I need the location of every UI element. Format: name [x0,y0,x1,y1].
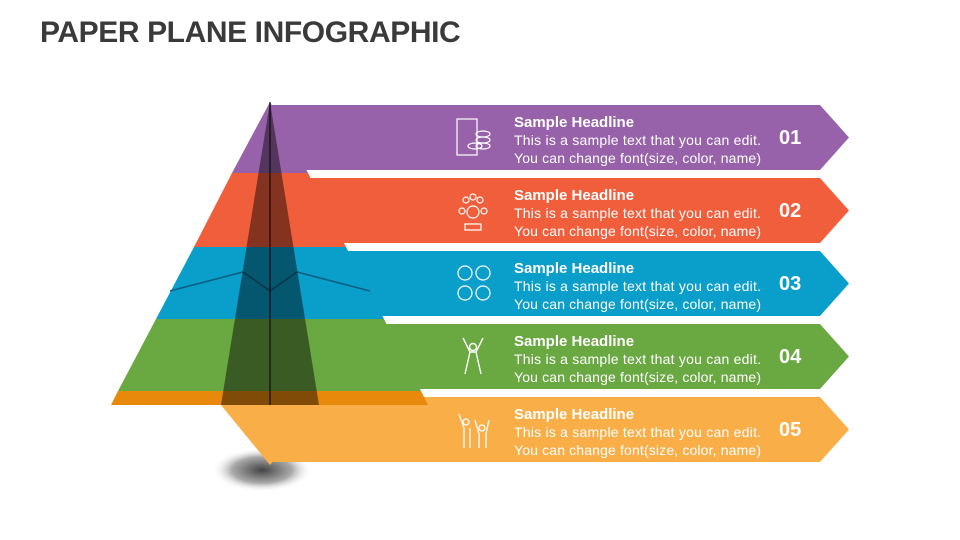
shadow [212,448,312,492]
text 3: This is a sample text that you can edit. [514,278,761,294]
panel: row 3 [270,251,849,316]
text 4: Sample Headline [514,333,634,350]
number 04: 04 [779,346,802,368]
number 03: 03 [779,273,801,295]
text 4: This is a sample text that you can edit. [514,351,761,367]
text 5: This is a sample text that you can edit. [514,424,761,440]
text 2: You can change font(size, color, name) [514,223,761,239]
panel: row 2 [270,178,849,243]
text 3 [514,260,761,312]
panel: row 5 [270,397,849,462]
text 5: Sample Headline [514,406,634,423]
text 2: This is a sample text that you can edit. [514,205,761,221]
icon: coins [457,119,490,155]
text 4 [514,333,761,385]
number 02: 02 [779,200,801,222]
text 3: Sample Headline [514,260,634,277]
panel: row 4 [270,324,849,389]
icon: team celebrate [459,414,489,448]
number 05: 05 [779,419,801,441]
text 1 [514,114,761,166]
icon: cheering person [463,338,483,374]
title: PAPER PLANE INFOGRAPHIC [40,16,460,49]
text 4: You can change font(size, color, name) [514,369,761,385]
text 5 [514,406,761,458]
icon: person ideas [459,194,487,230]
text 3: You can change font(size, color, name) [514,296,761,312]
text 1: Sample Headline [514,114,634,131]
icon: faces [458,266,490,300]
text 2: Sample Headline [514,187,634,204]
text 5: You can change font(size, color, name) [514,442,761,458]
text 1: You can change font(size, color, name) [514,150,761,166]
text 2 [514,187,761,239]
paper plane pyramid [111,102,428,465]
text 1: This is a sample text that you can edit. [514,132,761,148]
panel: row 1 [270,105,849,170]
number 01: 01 [779,127,801,149]
